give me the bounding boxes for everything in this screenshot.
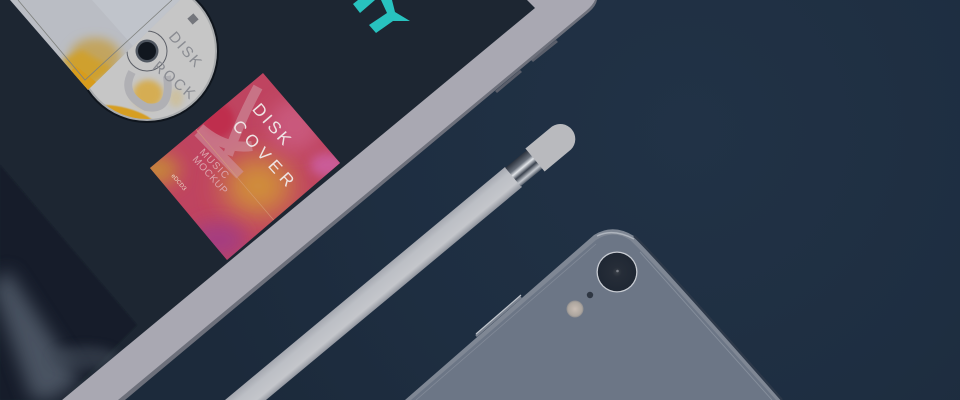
phone flash	[566, 300, 584, 318]
card titles: DISK	[248, 100, 297, 151]
phone right edge shadow	[634, 236, 782, 400]
tablet bezel	[0, 0, 595, 400]
phone edge highlights	[416, 244, 596, 400]
card gradient art	[131, 87, 346, 258]
tablet casing	[0, 0, 597, 400]
card titles: COVER	[229, 116, 302, 195]
teal letter on screen	[353, 0, 410, 33]
tablet screen	[0, 0, 535, 400]
card subtitle: MOCKUP	[190, 154, 230, 197]
pencil ferrule	[505, 150, 543, 186]
disc artwork	[105, 70, 185, 119]
album card	[150, 73, 340, 260]
pencil cap	[525, 124, 575, 172]
pencil body	[225, 167, 522, 400]
disc label	[149, 28, 206, 104]
disc label: DISK	[165, 28, 206, 72]
phone body	[405, 229, 782, 400]
CD disc	[84, 0, 219, 123]
disc small mark	[187, 13, 199, 25]
phone camera	[596, 252, 638, 292]
screen dark panel with light streak	[0, 165, 137, 400]
CD sleeve	[10, 0, 180, 90]
tablet side buttons	[495, 40, 558, 93]
phone microphone	[587, 292, 593, 298]
tablet	[0, 0, 597, 400]
sleeve yellow art	[60, 30, 148, 90]
card subtitle: MUSIC	[197, 147, 231, 182]
disc hole	[136, 40, 158, 62]
phone	[405, 229, 782, 400]
phone side button	[476, 295, 521, 336]
apple pencil	[225, 124, 575, 400]
disc label: ROCK	[149, 58, 200, 104]
card small label: eDCD3	[169, 173, 187, 193]
